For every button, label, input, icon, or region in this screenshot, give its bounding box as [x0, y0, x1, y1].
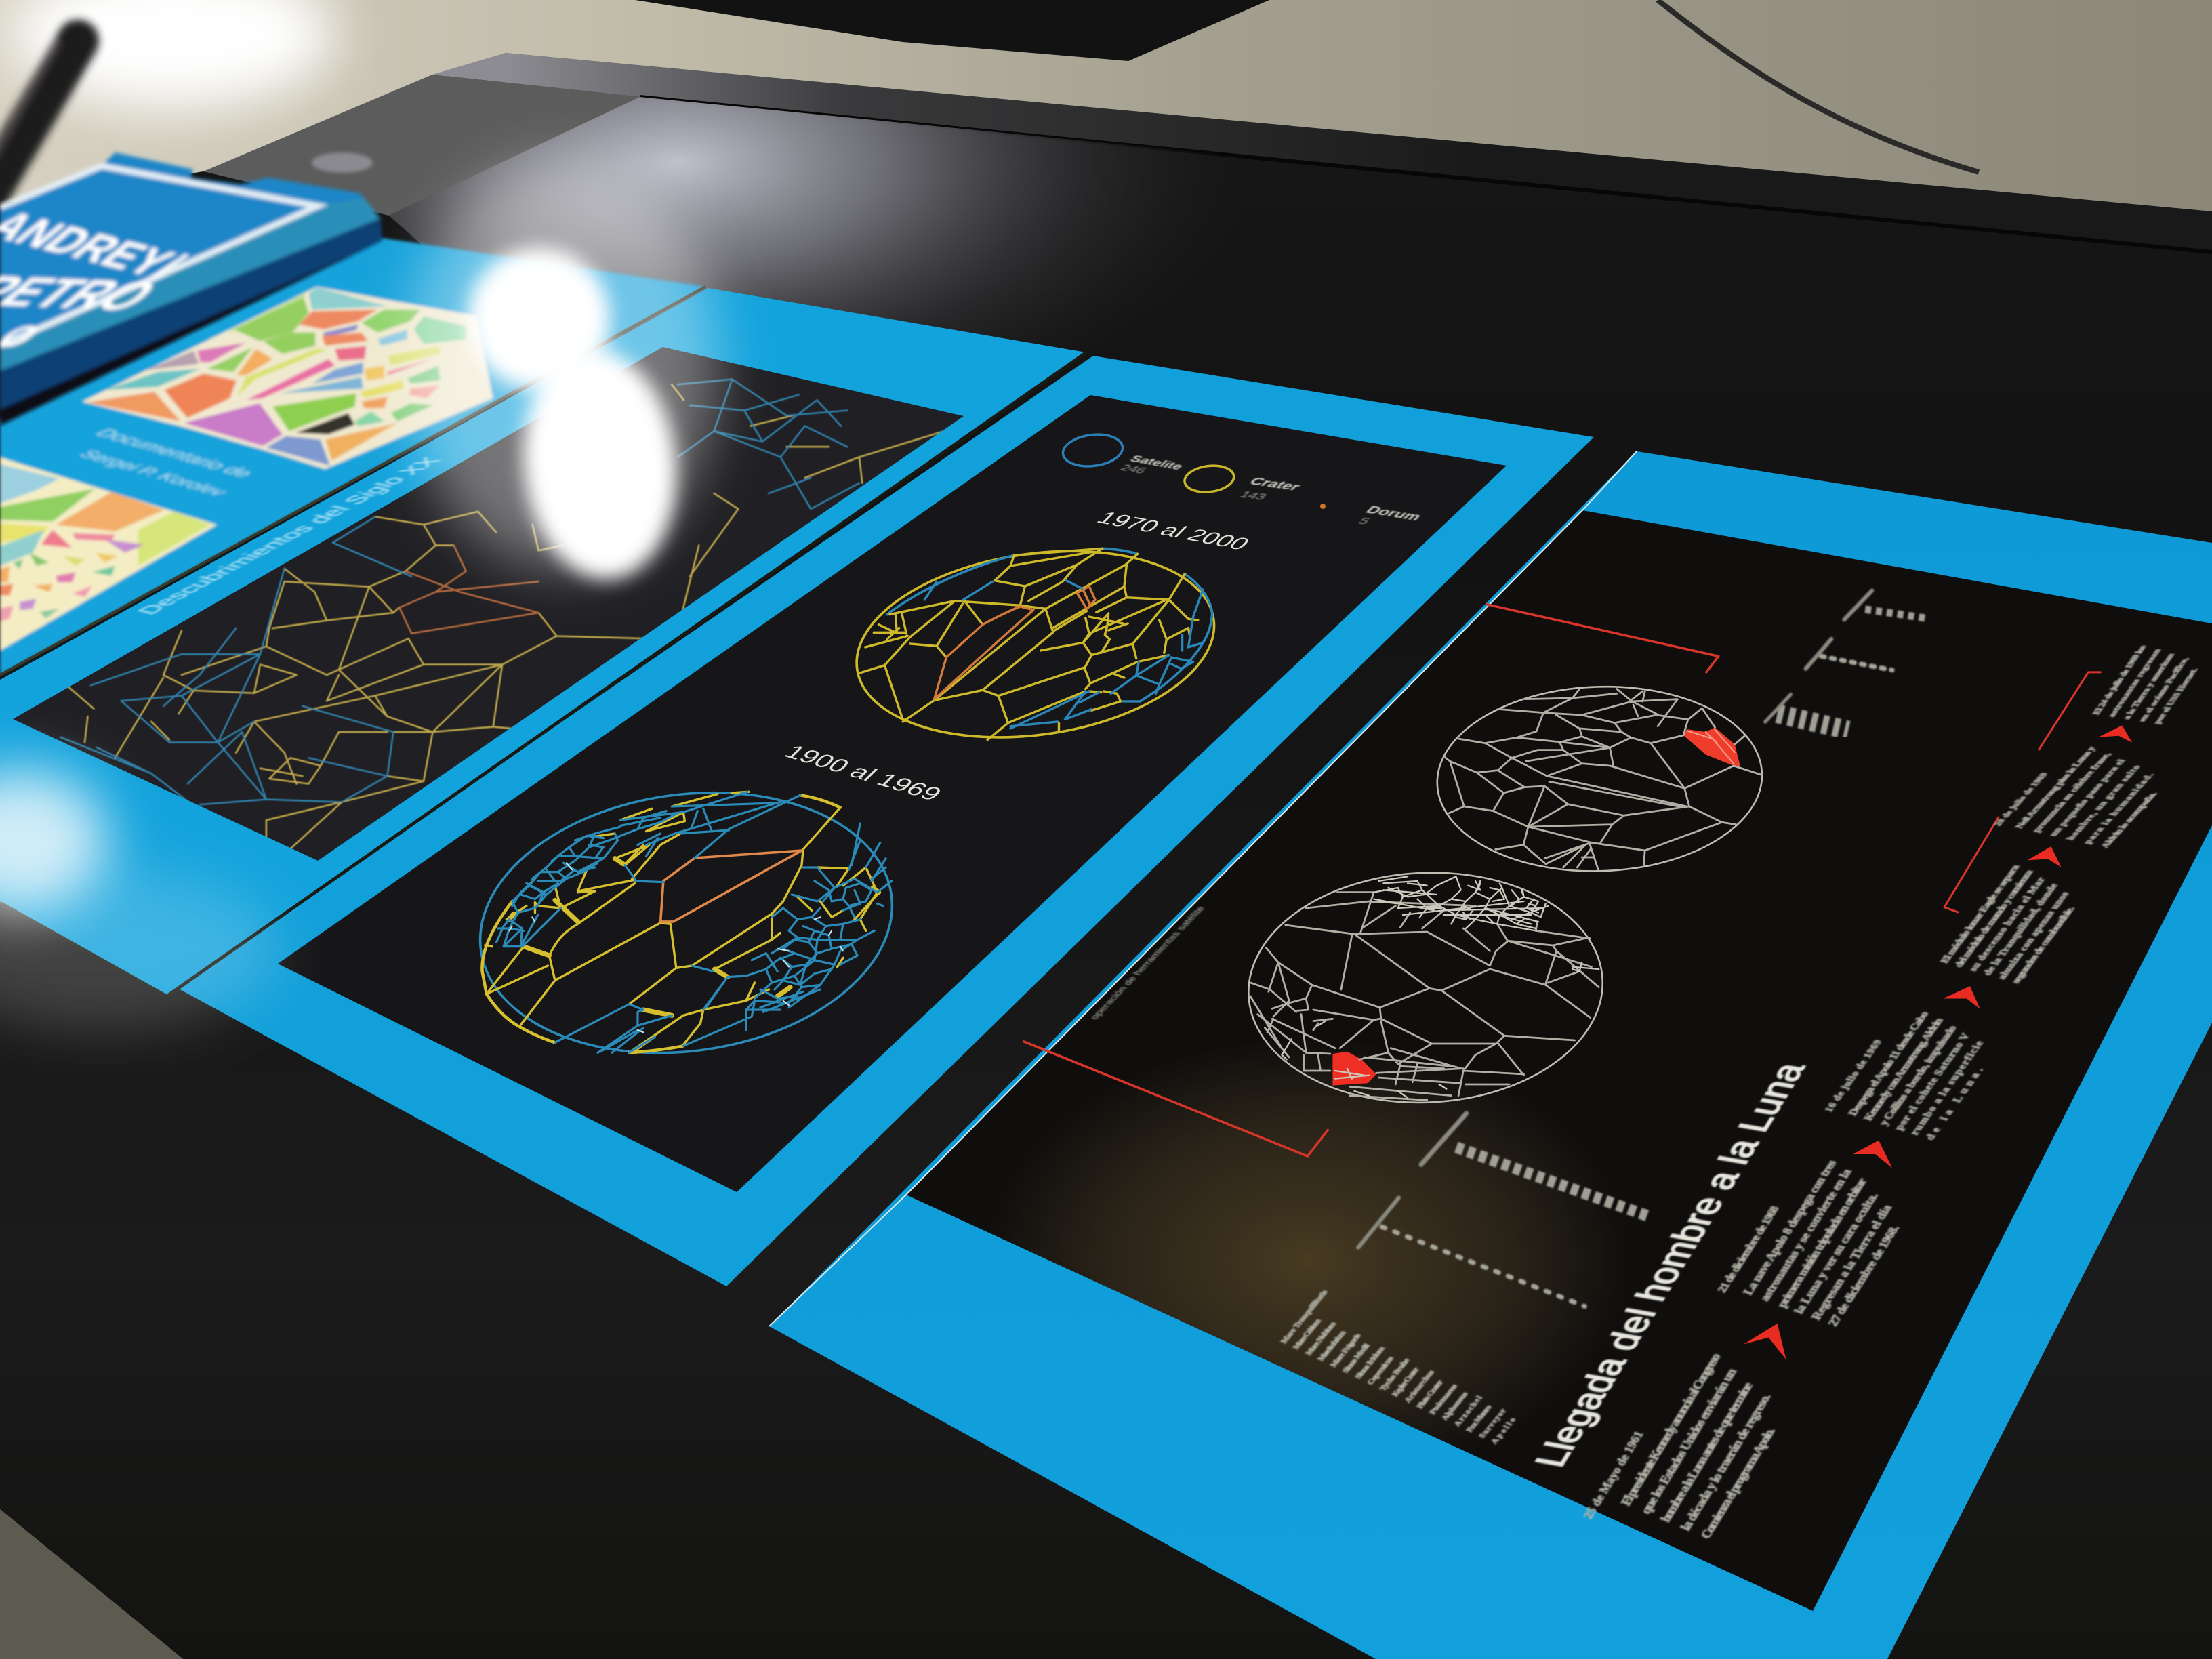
red arrow 5 — [2098, 725, 2132, 743]
timeline block 1: hombre a la Luna antes de que termine — [1658, 1380, 1756, 1524]
timeline block 4: su descenso hacia el Mar — [1967, 876, 2047, 972]
legend label dorsum: Dorum — [1363, 504, 1425, 523]
timeline block 3: 16 de julio de 1969 — [1823, 1039, 1884, 1113]
timeline block 2: 21 de diciembre de 1968 — [1715, 1204, 1782, 1294]
lower list of names: Mare Frigoris — [1328, 1332, 1363, 1368]
timeline block 6: por el USS Hornet. — [2151, 668, 2200, 724]
timeline block 2: la Luna y ver su cara oculta. — [1791, 1191, 1881, 1315]
timeline block 3 — [1823, 1004, 2009, 1145]
highlighted red cell lower — [1332, 1052, 1376, 1086]
card 1 caption second line: Sergei P. Korolev — [75, 448, 232, 498]
timeline block 4: del módulo de mando y comienza — [1953, 869, 2036, 968]
timeline block 3: Kennedy con Armstrong, Aldrin — [1862, 1017, 1946, 1122]
legend count crater: 143 — [1237, 489, 1269, 502]
lower list of names: Arzachel — [1452, 1394, 1484, 1428]
timeline block 1: que los Estados Unidos enviarán un — [1639, 1366, 1740, 1516]
timeline block 2: 27 de diciembre de 1968. — [1826, 1223, 1902, 1328]
white voronoi globe lower — [1242, 864, 1609, 1111]
timeline block 4 — [1938, 863, 2094, 985]
heading 1900 al 1969: 1900 al 1969 — [779, 741, 947, 804]
lower list of names: Mare Tranquillitatis — [1278, 1288, 1330, 1345]
cable — [1658, 0, 1979, 172]
timeline block 5: Neil Armstrong pisa la Luna y — [2013, 746, 2098, 830]
lower list of names: Alphonsus — [1439, 1390, 1470, 1422]
laptop on the table — [635, 0, 1269, 61]
timeline block 1 — [1580, 1342, 1804, 1564]
timeline block 3: Despega el Apolo 11 desde Cabo — [1847, 1010, 1931, 1117]
red bracket upper — [1487, 605, 1719, 672]
voronoi globe 1970 al 2000 — [842, 529, 1229, 760]
lower list of names: Sinus Iridum — [1353, 1345, 1387, 1380]
tiny card note: operación de herramientas satélite — [1088, 905, 1208, 1021]
timeline block 3: de la Luna. — [1924, 1067, 1986, 1141]
timeline block 2 — [1715, 1150, 1924, 1334]
legend label satellite: Satelite — [1127, 453, 1186, 472]
pen — [0, 41, 78, 203]
timeline block 5 — [1992, 741, 2184, 851]
timeline block 5: pronuncia su célebre frase, — [2031, 752, 2114, 834]
timeline block 4: El módulo lunar Eagle se separa — [1938, 863, 2022, 964]
lower list of names: Surveyor — [1476, 1407, 1508, 1439]
red arrow 4 — [2028, 846, 2062, 867]
red arrow 3 — [1943, 986, 1980, 1009]
voronoi globe 1900 al 1969 — [443, 757, 929, 1088]
red bracket timeline bottom — [1944, 817, 1999, 912]
lower list of names: Mare Imbrium — [1315, 1329, 1348, 1362]
timeline block 4: segundos de combustible. — [2010, 905, 2078, 985]
card 2: discoveries of the 20th century — [0, 287, 1086, 996]
legend: crater — [1183, 463, 1235, 495]
timeline block 6: astronautas regresan — [2106, 649, 2163, 718]
lower list of names: Mare Crisium — [1290, 1317, 1323, 1351]
dotted table rows lower — [1358, 1113, 1649, 1307]
red bracket timeline top — [2039, 672, 2100, 750]
colour voronoi lower tile — [0, 457, 217, 651]
highlighted red cell upper — [1683, 727, 1740, 766]
timeline block 1: Comienza el programa Apolo. — [1698, 1426, 1778, 1541]
legend count dorsum: 5 — [1355, 516, 1372, 527]
timeline block 6: a la Tierra y amerizan — [2121, 653, 2176, 720]
timeline block 5: hombre, un gran salto — [2065, 764, 2143, 841]
lower list of names: Apollo — [1489, 1416, 1518, 1446]
white voronoi globe upper — [1434, 681, 1765, 876]
glare on the glossy cards — [0, 163, 718, 1030]
lower list of names: Ptolemaeus — [1427, 1382, 1459, 1416]
timeline block 5: Aldrin lo acompaña. — [2099, 792, 2160, 848]
timeline block 3: y Collins a bordo, impulsado — [1877, 1025, 1959, 1127]
timeline block 2: La nave Apolo 8 despega con tres — [1740, 1158, 1839, 1296]
timeline block 5: para la humanidad. — [2082, 773, 2156, 845]
lower list of names: Plato Crater — [1414, 1378, 1446, 1410]
legend count satellite: 246 — [1118, 462, 1149, 476]
card 3: craters 1900-2000 — [0, 352, 1594, 1286]
timeline block 1: 25 de Mayo de 1961 — [1580, 1429, 1646, 1521]
red bracket lower — [1023, 1042, 1328, 1156]
upper table rows — [1765, 590, 1926, 731]
timeline block 3: por el cohete Saturno V — [1893, 1032, 1973, 1132]
title: Llegada del hombre a la Luna — [1526, 1060, 1814, 1470]
timeline block 6 — [2090, 645, 2209, 724]
timeline block 2: Regresan a la Tierra el día — [1808, 1203, 1894, 1322]
timeline block 3: rumbo a la superficie — [1908, 1040, 1986, 1136]
timeline block 5: un pequeño paso para el — [2048, 758, 2128, 837]
timeline block 6: El 24 de julio de 1969 los — [2090, 645, 2148, 715]
lower list of names: Mare Nubium — [1303, 1320, 1338, 1357]
bright reflection on the table — [10, 0, 335, 108]
timeline block 2: primera misión tripulada en orbitar — [1774, 1176, 1869, 1309]
lower list of names: Copernicus — [1365, 1355, 1396, 1386]
timeline block 1: la década y lo traerán de regreso. — [1679, 1392, 1774, 1532]
card 2 caption: Descubrimientos del Siglo XX — [132, 455, 446, 617]
colour voronoi upper tile — [82, 287, 493, 469]
card 1 caption: Documentario de — [91, 426, 258, 480]
timeline block 5: 20 de julio de 1969 — [1992, 772, 2050, 827]
card 1: colourful documentary cards — [0, 232, 705, 675]
card 4: arrival of man on the moon — [769, 451, 2212, 1659]
red arrow 1 — [1744, 1324, 1786, 1359]
legend: dorsum — [1320, 504, 1326, 509]
timeline block 6: en el océano Pacífico, — [2136, 657, 2190, 722]
timeline block 4: aluniza con apenas unos — [1996, 890, 2071, 981]
legend label crater: Crater — [1246, 475, 1305, 493]
book — [0, 152, 382, 426]
card 2 voronoi map — [60, 380, 944, 848]
red arrow 2 — [1853, 1141, 1892, 1168]
lower list of names: Sinus Medii — [1340, 1342, 1372, 1374]
lower list of names: Aristarchus — [1402, 1368, 1436, 1404]
timeline block 2: astronautas y se convierte en la — [1757, 1167, 1854, 1303]
timeline block 4: de la Tranquilidad, donde — [1982, 882, 2060, 977]
heading 1970 al 2000: 1970 al 2000 — [1092, 508, 1254, 554]
lower list of names: Fra Mauro — [1464, 1404, 1494, 1433]
lower list of names: Tycho Brahe — [1377, 1357, 1412, 1392]
timeline block 1: El presidente Kennedy anuncia al Congreso — [1618, 1351, 1724, 1508]
legend: satellite — [1061, 432, 1124, 469]
lower list of names: Kepler Crater — [1389, 1366, 1422, 1398]
lower list of names — [1278, 1288, 1540, 1446]
